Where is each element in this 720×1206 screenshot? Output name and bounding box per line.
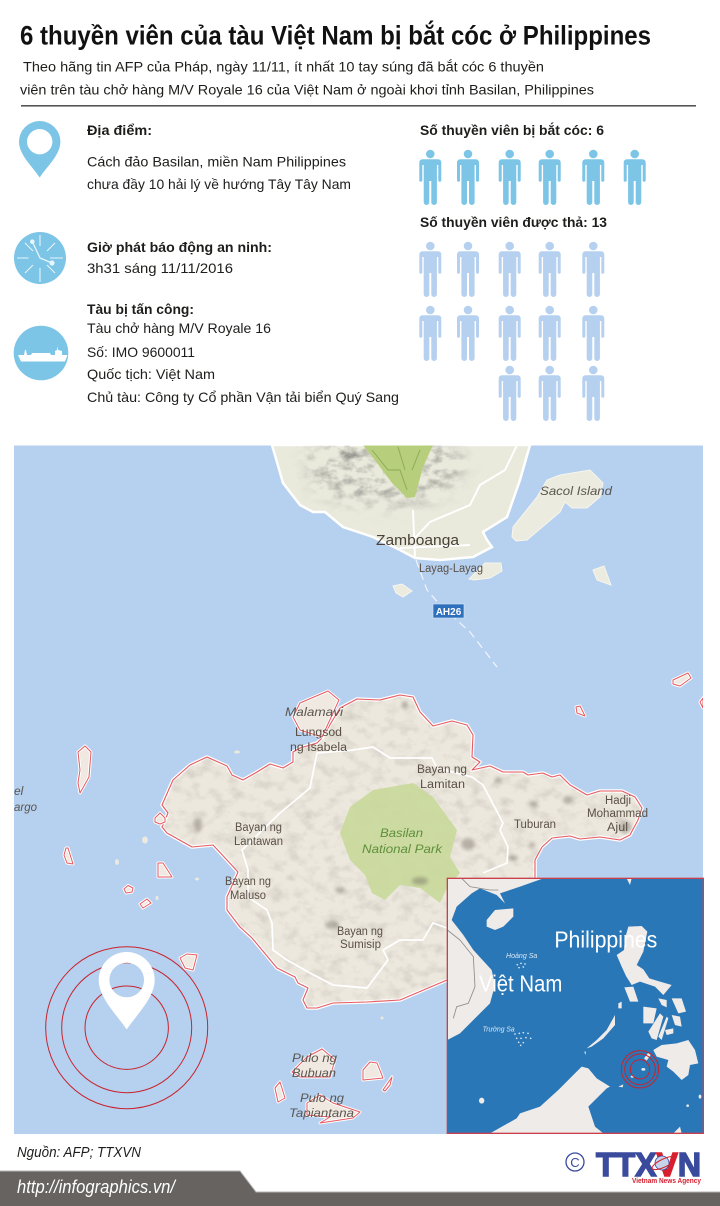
title: 6 thuyền viên của tàu Việt Nam bị bắt cóc ở Philippines (20, 20, 651, 50)
place labels on the map: Lamitan (420, 779, 465, 791)
place labels on the map (14, 705, 648, 1120)
Basilan National Park (340, 783, 460, 903)
place labels on the map: Bayan ng (417, 764, 467, 776)
icon: white location pin (99, 952, 155, 1030)
inset label: Philippines: Philippines (554, 926, 657, 952)
ship text: Chủ tàu: Công ty Cổ phần Vận tải biển Quý Sang (87, 389, 399, 405)
map: surrounding islands (64, 673, 703, 1123)
place labels on the map: Lungsod (295, 727, 342, 739)
place labels on the map: National Park (362, 842, 443, 856)
place labels on the map: Basilan (380, 826, 423, 840)
inset land: mainland Asia (447, 878, 543, 1040)
inset land: islands and Borneo (487, 878, 698, 1133)
place labels on the map: Bayan ng (337, 926, 383, 938)
location text (87, 122, 351, 192)
alarm text (87, 239, 272, 276)
source note: Nguồn: AFP; TTXVN (17, 1145, 141, 1161)
ship text (87, 301, 399, 405)
ferry route dashed line (416, 560, 497, 667)
Basilan roads (242, 747, 508, 988)
icon: location pin (19, 121, 60, 178)
map: Zamboanga peninsula (272, 445, 530, 560)
ship text: Quốc tịch: Việt Nam (87, 366, 215, 382)
target rings (46, 947, 208, 1109)
Hoàng Sa dots (516, 962, 526, 968)
map: Sacol Island and nearby islets (393, 470, 611, 597)
place labels on the map: Pulo ng (292, 1051, 337, 1065)
label: Zamboanga: Zamboanga (376, 532, 460, 549)
place labels on the map: Bubuan (292, 1066, 336, 1080)
ship text: Tàu bị tấn công: (87, 301, 194, 317)
location text: chưa đầy 10 hải lý về hướng Tây Tây Nam (87, 176, 351, 192)
place labels on the map: Maluso (230, 890, 266, 902)
icons: thirteen released crew members (419, 242, 604, 421)
place labels on the map: Bayan ng (235, 822, 282, 834)
panel: location (19, 121, 351, 192)
place labels on the map: Bayan ng (225, 876, 271, 888)
globe emblem (651, 1154, 677, 1172)
label: Layag-Layag: Layag-Layag (419, 563, 483, 575)
agency name: Vietnam News Agency (632, 1178, 701, 1185)
footer URL: http://infographics.vn/ (17, 1177, 177, 1197)
place labels on the map: Sumisip (340, 939, 381, 951)
panel: main map (14, 445, 703, 1134)
location text: Cách đảo Basilan, miền Nam Philippines (87, 154, 346, 170)
map: Basilan island (160, 690, 650, 1010)
place labels on the map: Ajul (607, 822, 628, 834)
place labels on the map: Lantawan (234, 836, 283, 848)
ship text: Tàu chở hàng M/V Royale 16 (87, 320, 271, 336)
place labels on the map: argo (14, 800, 37, 814)
panel: released crew (419, 214, 607, 421)
place labels on the map: Mohammad (587, 808, 648, 820)
copyright symbol: C (570, 1155, 580, 1170)
icons: six kidnapped crew members (419, 150, 646, 205)
inset label: Hoàng Sa: Hoàng Sa (506, 951, 537, 960)
alarm text: Giờ phát báo động an ninh: (87, 239, 272, 255)
footer bar (0, 1171, 720, 1206)
alarm text: 3h31 sáng 11/11/2016 (87, 260, 233, 276)
intro text (20, 58, 594, 98)
place labels on the map: Hadji (605, 795, 631, 807)
highway shield AH26 (433, 604, 464, 618)
inset target rings (621, 1051, 659, 1088)
intro text: Theo hãng tin AFP của Pháp, ngày 11/11, ít nhất 10 tay súng đã bắt cóc 6 thuyền (23, 58, 544, 74)
icon: ship (14, 326, 68, 380)
heading: kidnapped: Số thuyền viên bị bắt cóc: 6 (420, 121, 604, 138)
inset label: Trường Sa: Trường Sa (483, 1025, 515, 1034)
ship text: Số: IMO 9600011 (87, 344, 195, 360)
inset borders (447, 878, 498, 1018)
place labels on the map: Tuburan (514, 819, 556, 831)
place labels on the map: Malamavi (285, 705, 343, 719)
panel: inset locator map (447, 878, 703, 1133)
wordmark: TTXVN (596, 1146, 701, 1183)
inset label: Việt Nam: Việt Nam (479, 971, 562, 997)
label: Sacol Island: Sacol Island (540, 484, 612, 498)
panel: alarm time (14, 232, 272, 284)
icon: clock (14, 232, 66, 284)
panel: kidnapped crew (419, 121, 646, 205)
highway shield AH26: AH26 (436, 607, 462, 618)
heading: released: Số thuyền viên được thả: 13 (420, 214, 607, 230)
place labels on the map: ng Isabela (290, 742, 348, 754)
place labels on the map: el (14, 784, 24, 798)
location text: Địa điểm: (87, 122, 152, 138)
place labels on the map: Pulo ng (300, 1091, 344, 1105)
logo: TTXVN (566, 1146, 701, 1185)
Trường Sa dots (514, 1032, 531, 1046)
place labels on the map: Tapiantana (289, 1106, 354, 1120)
intro text: viên trên tàu chở hàng M/V Royale 16 của Việt Nam ở ngoài khơi tỉnh Basilan, Philippines (20, 82, 594, 98)
panel: attacked ship (14, 301, 399, 405)
